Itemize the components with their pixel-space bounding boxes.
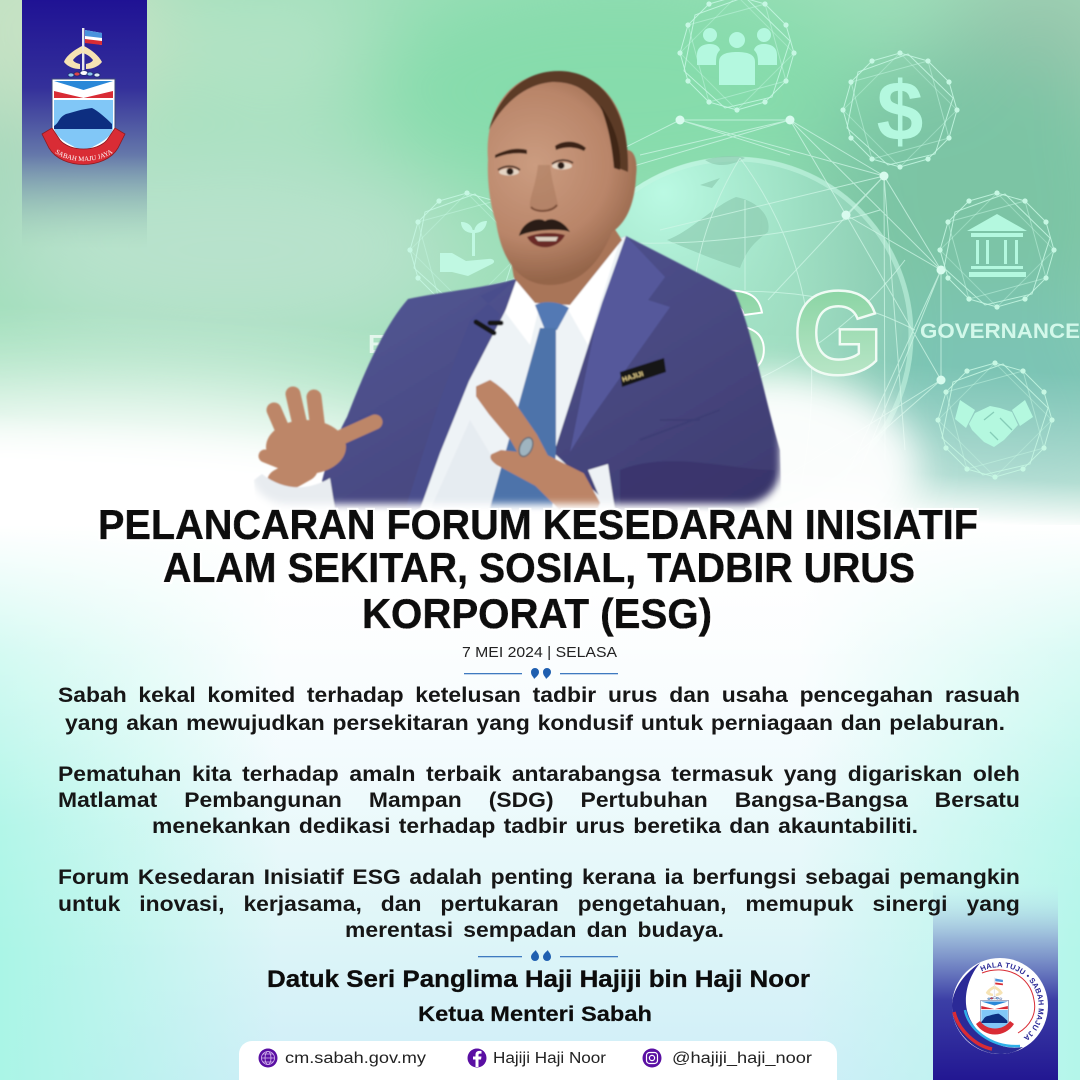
paragraph 2 bbox=[58, 763, 1020, 838]
lapel microphone bbox=[476, 322, 501, 333]
title: KORPORAT (ESG) bbox=[362, 590, 712, 637]
paragraph 1 bbox=[58, 684, 1020, 735]
name tag: HAJIJI bbox=[622, 371, 644, 384]
ring bbox=[518, 436, 534, 458]
footer contact bar: @hajiji_haji_noor bbox=[672, 1050, 812, 1067]
quote body text: yang akan mewujudkan persekitaran yang kondusif untuk perniagaan dan pelaburan. bbox=[65, 712, 1005, 735]
neck bbox=[510, 225, 622, 305]
state crest: SABAH MAJU JAYA bbox=[55, 150, 113, 162]
E S G letters and GOVERNANCE label: S bbox=[690, 268, 767, 398]
name tag bbox=[620, 358, 666, 387]
footer contact bar bbox=[239, 1041, 837, 1080]
shirt bbox=[418, 236, 626, 515]
portrait of Datuk Seri Hajiji bbox=[254, 71, 782, 530]
globe with network bbox=[557, 116, 946, 513]
quote body text: Matlamat Pembangunan Mampan (SDG) Pertubuhan Bangsa-Bangsa Bersatu bbox=[58, 789, 1020, 812]
quote body text: untuk inovasi, kerjasama, dan pertukaran pengetahuan, memupuk sinergi yang bbox=[58, 893, 1020, 916]
quote body text: merentasi sempadan dan budaya. bbox=[345, 919, 724, 942]
footer contact bar: cm.sabah.gov.my bbox=[285, 1050, 426, 1067]
quote body text: Forum Kesedaran Inisiatif ESG adalah penting kerana ia berfungsi sebagai pemangkin bbox=[58, 866, 1020, 889]
state crest bbox=[42, 28, 126, 165]
icon: bank orb bbox=[937, 190, 1057, 310]
quote body text: Pematuhan kita terhadap amaln terbaik antarabangsa termasuk yang digariskan oleh bbox=[58, 763, 1020, 786]
quote body text: menekankan dedikasi terhadap tadbir urus beretika dan akauntabiliti. bbox=[152, 815, 918, 838]
E S G letters and GOVERNANCE label: GOVERNANCE bbox=[920, 319, 1080, 343]
top left blue panel bbox=[22, 0, 147, 250]
icon: website bbox=[258, 1048, 278, 1068]
opening quote divider bbox=[464, 668, 618, 679]
quote body text: Sabah kekal komited terhadap ketelusan tadbir urus dan usaha pencegahan rasuah bbox=[58, 684, 1020, 707]
tie bbox=[488, 302, 569, 515]
right hand bbox=[477, 381, 599, 524]
quote body text bbox=[58, 684, 1020, 942]
right cuff bbox=[587, 463, 616, 508]
icon: dollar orb bbox=[840, 50, 960, 170]
jacket bbox=[322, 236, 782, 515]
E S G letters and GOVERNANCE label: G bbox=[794, 268, 882, 398]
title: ALAM SEKITAR, SOSIAL, TADBIR URUS bbox=[163, 544, 915, 591]
icon: handshake orb bbox=[935, 360, 1055, 480]
left cuff bbox=[254, 474, 336, 508]
paragraph 3 bbox=[58, 866, 1020, 942]
icon: plant orb bbox=[407, 190, 527, 310]
footer contact bar: Hajiji Haji Noor bbox=[493, 1050, 606, 1067]
E S G letters and GOVERNANCE label: E bbox=[368, 329, 385, 359]
title: PELANCARAN FORUM KESEDARAN INISIATIF bbox=[98, 501, 978, 548]
E S G letters and GOVERNANCE label bbox=[368, 268, 1080, 565]
icon: instagram bbox=[642, 1048, 662, 1068]
speaker role: Ketua Menteri Sabah bbox=[418, 1003, 652, 1026]
icon: dollar orb: $ bbox=[877, 64, 923, 158]
closing quote divider bbox=[478, 950, 618, 961]
speaker name: Datuk Seri Panglima Haji Hajiji bin Haji Noor bbox=[267, 966, 810, 993]
head bbox=[488, 71, 637, 285]
date: 7 MEI 2024 | SELASA bbox=[462, 644, 617, 661]
icon: people orb bbox=[677, 0, 797, 113]
title bbox=[98, 501, 978, 637]
icon: facebook bbox=[468, 1048, 486, 1068]
left hand bbox=[265, 394, 375, 482]
bottom right blue panel bbox=[933, 880, 1058, 1080]
badge: Hala Tuju Sabah Maju Jaya: HALA TUJU • SABAH MAJU JAYA bbox=[980, 962, 1044, 1040]
